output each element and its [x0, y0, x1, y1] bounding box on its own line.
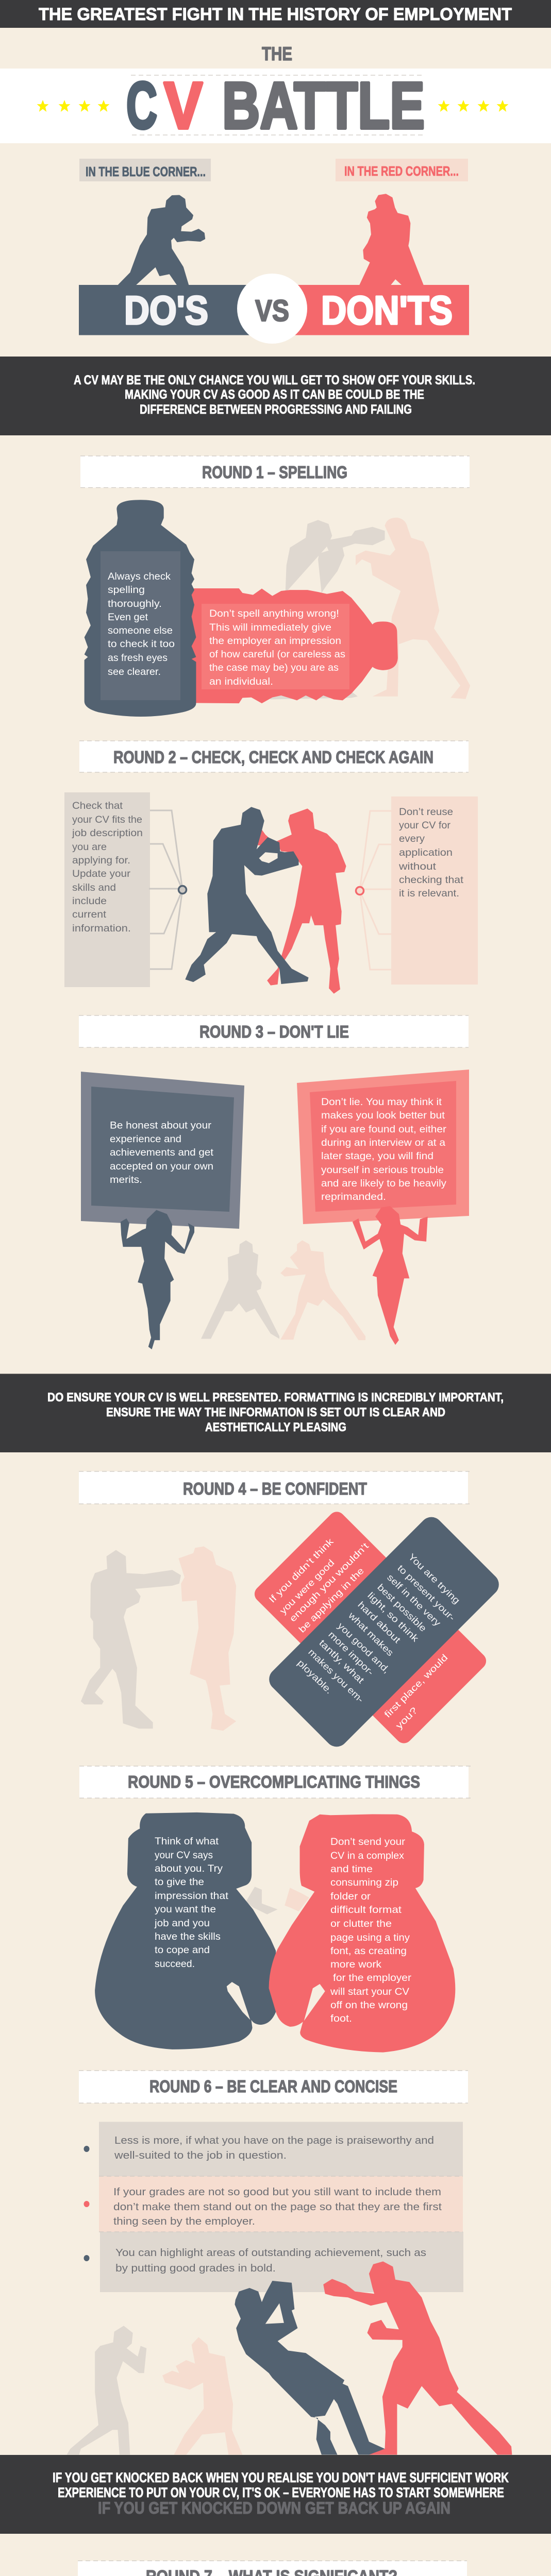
- panel: red diamond: be applying in the: [297, 1565, 366, 1635]
- text: blue bottle label: Even get: [108, 612, 148, 623]
- list: round 6 tips: thing seen by the employer.: [113, 2215, 255, 2227]
- icon: blue boxer: [119, 196, 205, 285]
- text: blue glove: succeed.: [155, 1958, 195, 1970]
- text: blue glove: about you. Try: [155, 1863, 223, 1874]
- ghost boxers: round 4: [81, 1547, 236, 1731]
- panel: round 2 right text: every: [399, 833, 425, 844]
- panel: round 2 left text: you are: [72, 841, 107, 853]
- panel: round 2 left text: Check that: [72, 800, 123, 811]
- icon: two boxers clinching: [185, 807, 346, 994]
- panel: blue diamond: [264, 1513, 504, 1751]
- text: red glove: difficult format: [330, 1904, 402, 1916]
- blue sign: achievements and get: [110, 1147, 214, 1158]
- panel: blue diamond: ployable.: [295, 1657, 335, 1696]
- text: red glove: will start your CV: [330, 1986, 409, 1997]
- red sign: reprimanded.: [321, 1191, 386, 1202]
- heading: round 7: [78, 2561, 467, 2576]
- title: the cv battle: THE: [262, 43, 292, 64]
- intro band: MAKING YOUR CV AS GOOD AS IT CAN BE COULD BE THE: [125, 387, 424, 402]
- blue sign: [81, 1072, 244, 1229]
- text: blue glove: your CV says: [155, 1850, 213, 1861]
- label: red corner: IN THE RED CORNER...: [344, 163, 459, 179]
- red sign: later stage, you will find: [321, 1150, 433, 1162]
- panel: red diamond: you were good: [278, 1557, 337, 1616]
- panel: round 2 left text: job description: [72, 827, 143, 839]
- panel: blue diamond: You are trying: [406, 1551, 462, 1606]
- list: round 6 tips: well-suited to the job in question.: [114, 2149, 287, 2161]
- panel: round 2 left text: information.: [72, 923, 131, 934]
- panel: red diamond: If you didn’t think: [267, 1536, 336, 1605]
- band: knocked back: IF YOU GET KNOCKED DOWN GET BACK UP AGAIN: [98, 2499, 450, 2517]
- panel: red diamond: first place, would: [382, 1652, 450, 1720]
- panel: round 2 left text: [64, 792, 150, 987]
- panel: round 1 spelling: [85, 500, 470, 717]
- text: red glove: Don’t send your: [330, 1836, 406, 1848]
- text: red glove: [330, 1836, 412, 2024]
- text: red bottle label: This will immediately give: [209, 622, 331, 633]
- label: blue corner: IN THE BLUE CORNER...: [86, 164, 206, 179]
- text: blue glove: to give the: [155, 1876, 204, 1888]
- panel: round 2 left text: current: [72, 909, 107, 920]
- band: formatting: ENSURE THE WAY THE INFORMATION IS SET OUT IS CLEAR AND: [106, 1405, 445, 1419]
- text: blue bottle label: thoroughly.: [108, 598, 162, 609]
- heading: round 2: [79, 741, 469, 772]
- red sign: if you are found out, either: [321, 1124, 447, 1135]
- panel: round 2 right text: it is relevant.: [399, 888, 459, 899]
- text: red glove: foot.: [330, 2013, 352, 2024]
- heading: round 2: ROUND 2 – CHECK, CHECK AND CHECK AGAIN: [113, 748, 433, 767]
- heading: round 4: [79, 1471, 470, 1504]
- heading: round 4: ROUND 4 – BE CONFIDENT: [183, 1479, 367, 1498]
- red sign: yourself in serious trouble: [321, 1164, 444, 1176]
- icon: red glove: [269, 1814, 455, 2053]
- text: blue glove: job and you: [154, 1918, 210, 1929]
- panel: blue diamond: self in the very: [385, 1572, 443, 1628]
- red sign: [297, 1070, 469, 1224]
- title: the cv battle: BATTLE: [222, 69, 425, 143]
- title: the cv battle: C: [126, 69, 157, 143]
- do's vs don'ts bar: VS: [255, 294, 289, 328]
- top banner: [0, 0, 551, 28]
- text: blue bottle label: someone else: [108, 625, 173, 636]
- text: red glove: for the employer: [333, 1972, 412, 1984]
- ghost boxers: [201, 1240, 365, 1340]
- icon: red bottle on its side: [186, 588, 398, 703]
- text: red glove: and time: [330, 1863, 373, 1875]
- panel: blue diamond: makes you em-: [306, 1647, 366, 1705]
- panel: round 2 left text: include: [72, 895, 107, 907]
- icon: blue woman: [121, 1210, 194, 1349]
- list: round 6 tips: by putting good grades in bold.: [115, 2262, 276, 2274]
- ghost boxers: [267, 518, 470, 700]
- do's vs don'ts bar: DO'S: [124, 287, 208, 333]
- panel: round 2 left text: applying for.: [72, 855, 130, 866]
- panel: round 2 left text: skills and: [72, 882, 116, 893]
- icon: red boxer punching: [323, 2261, 512, 2455]
- blue sign: accepted on your own: [110, 1161, 213, 1172]
- text: red glove: font, as creating: [330, 1945, 407, 1957]
- panel: blue diamond: light, so think: [365, 1590, 421, 1644]
- text: blue glove: have the skills: [155, 1931, 221, 1942]
- list: round 6 tips: [84, 2122, 463, 2292]
- label: red corner: [336, 159, 468, 181]
- panel: round 2 right text: Don’t reuse: [399, 806, 453, 818]
- panel: round 2 left text: Update your: [72, 868, 131, 879]
- text: red glove: consuming zip: [330, 1877, 398, 1888]
- text: red glove: page using a tiny: [330, 1932, 410, 1943]
- panel: blue diamond: hard about: [356, 1599, 403, 1645]
- text: red bottle label: [202, 604, 349, 689]
- panel: round 2 right text: your CV for: [399, 820, 451, 831]
- panel: red diamond: enough you wouldn’t: [288, 1541, 371, 1624]
- title: the cv battle: [0, 43, 551, 143]
- list: round 6 tips: If your grades are not so good but you still want to include them: [113, 2186, 441, 2198]
- text: red bottle label: the case may be) you are as: [209, 662, 339, 673]
- text: red glove: folder or: [330, 1891, 371, 1902]
- text: red glove: off on the wrong: [330, 1999, 408, 2011]
- text: blue glove: to cope and: [155, 1944, 210, 1956]
- heading: round 3: ROUND 3 – DON'T LIE: [199, 1022, 349, 1041]
- list: round 6 tips: You can highlight areas of outstanding achievement, such as: [115, 2247, 426, 2259]
- intro band: [0, 357, 551, 435]
- connector: left lines: [149, 810, 187, 969]
- top banner: THE GREATEST FIGHT IN THE HISTORY OF EMPLOYMENT: [39, 5, 512, 24]
- title: the cv battle: V: [164, 69, 203, 143]
- list: round 6 tips: Less is more, if what you have on the page is praiseworthy and: [114, 2134, 434, 2146]
- icon: red boxer: [360, 194, 423, 285]
- text: blue bottle label: as fresh eyes: [108, 652, 168, 664]
- red sign: during an interview or at a: [321, 1137, 445, 1148]
- icon: blue bottle: [85, 500, 196, 717]
- text: blue bottle label: see clearer.: [108, 666, 161, 677]
- panel: blue diamond: you good and,: [336, 1620, 392, 1675]
- heading: round 6: ROUND 6 – BE CLEAR AND CONCISE: [149, 2077, 397, 2096]
- icon: blue glove: [95, 1812, 276, 2049]
- blue sign: merits.: [110, 1174, 142, 1185]
- panel: red diamond: [251, 1509, 490, 1747]
- intro band: DIFFERENCE BETWEEN PROGRESSING AND FAILING: [140, 402, 412, 417]
- heading: round 6: [79, 2071, 468, 2103]
- panel: blue diamond: best possible: [375, 1582, 428, 1634]
- heading: round 1: [80, 456, 470, 487]
- band: formatting: [0, 1374, 551, 1452]
- panel: blue diamond: more impor-: [326, 1629, 376, 1677]
- label: blue corner: [79, 159, 211, 181]
- connector: right lines: [356, 811, 393, 970]
- text: blue glove: [154, 1836, 229, 1970]
- red sign: and are likely to be heavily: [321, 1178, 446, 1189]
- blue sign: Be honest about your: [110, 1120, 212, 1131]
- text: blue bottle label: Always check: [108, 571, 171, 582]
- text: blue glove: Think of what: [155, 1836, 219, 1847]
- do's vs don'ts bar: [79, 274, 469, 344]
- red sign: Don’t lie. You may think it: [321, 1096, 442, 1108]
- blue sign: experience and: [110, 1133, 181, 1145]
- text: red glove: CV in a complex: [330, 1850, 404, 1861]
- panel: red diamond: you?: [394, 1705, 420, 1731]
- red sign: makes you look better but: [321, 1110, 445, 1121]
- text: red bottle label: the employer an impression: [209, 635, 341, 647]
- panel: round 2 right text: without: [398, 861, 437, 872]
- icon: blue boxer knocked back: [235, 2281, 385, 2455]
- text: red bottle label: of how careful (or careless as: [209, 649, 345, 660]
- panel: blue diamond: what makes: [346, 1610, 395, 1658]
- icon: red woman: [353, 1206, 428, 1345]
- text: blue bottle label: [101, 551, 180, 700]
- panel: round 5 gloves: [95, 1812, 455, 2053]
- text: blue glove: impression that: [155, 1890, 229, 1902]
- band: knocked back: [0, 2455, 551, 2534]
- text: blue bottle label: to check it too: [108, 638, 175, 650]
- heading: round 1: ROUND 1 – SPELLING: [202, 463, 347, 482]
- text: red bottle label: an individual.: [209, 676, 273, 687]
- band: formatting: AESTHETICALLY PLEASING: [205, 1420, 346, 1434]
- text: blue glove: you want the: [155, 1904, 216, 1915]
- ghost boxers: round 6: [67, 2326, 242, 2455]
- text: red glove: more work: [330, 1959, 381, 1970]
- heading: round 3: [79, 1015, 469, 1047]
- panel: blue diamond: to present your-: [395, 1563, 457, 1623]
- text: red glove: or clutter the: [330, 1918, 392, 1929]
- text: red bottle label: Don’t spell anything wrong!: [209, 608, 339, 619]
- panel: blue diamond: tantly, what: [317, 1637, 366, 1685]
- panel: round 2 right text: [391, 796, 478, 985]
- do's vs don'ts bar: DON'TS: [321, 287, 453, 333]
- heading: round 5: [79, 1766, 471, 1798]
- list: round 6 tips: don’t make them stand out on the page so that they are the first: [113, 2201, 442, 2213]
- panel: round 2 left text: your CV fits the: [72, 814, 142, 825]
- panel: round 2 right text: application: [399, 847, 453, 858]
- text: blue bottle label: spelling: [108, 584, 145, 596]
- heading: round 5: ROUND 5 – OVERCOMPLICATING THINGS: [128, 1772, 420, 1791]
- panel: round 3: [81, 1070, 469, 1349]
- panel: round 2 right text: checking that: [399, 874, 464, 886]
- ghost boxer remnants: [246, 1887, 309, 1914]
